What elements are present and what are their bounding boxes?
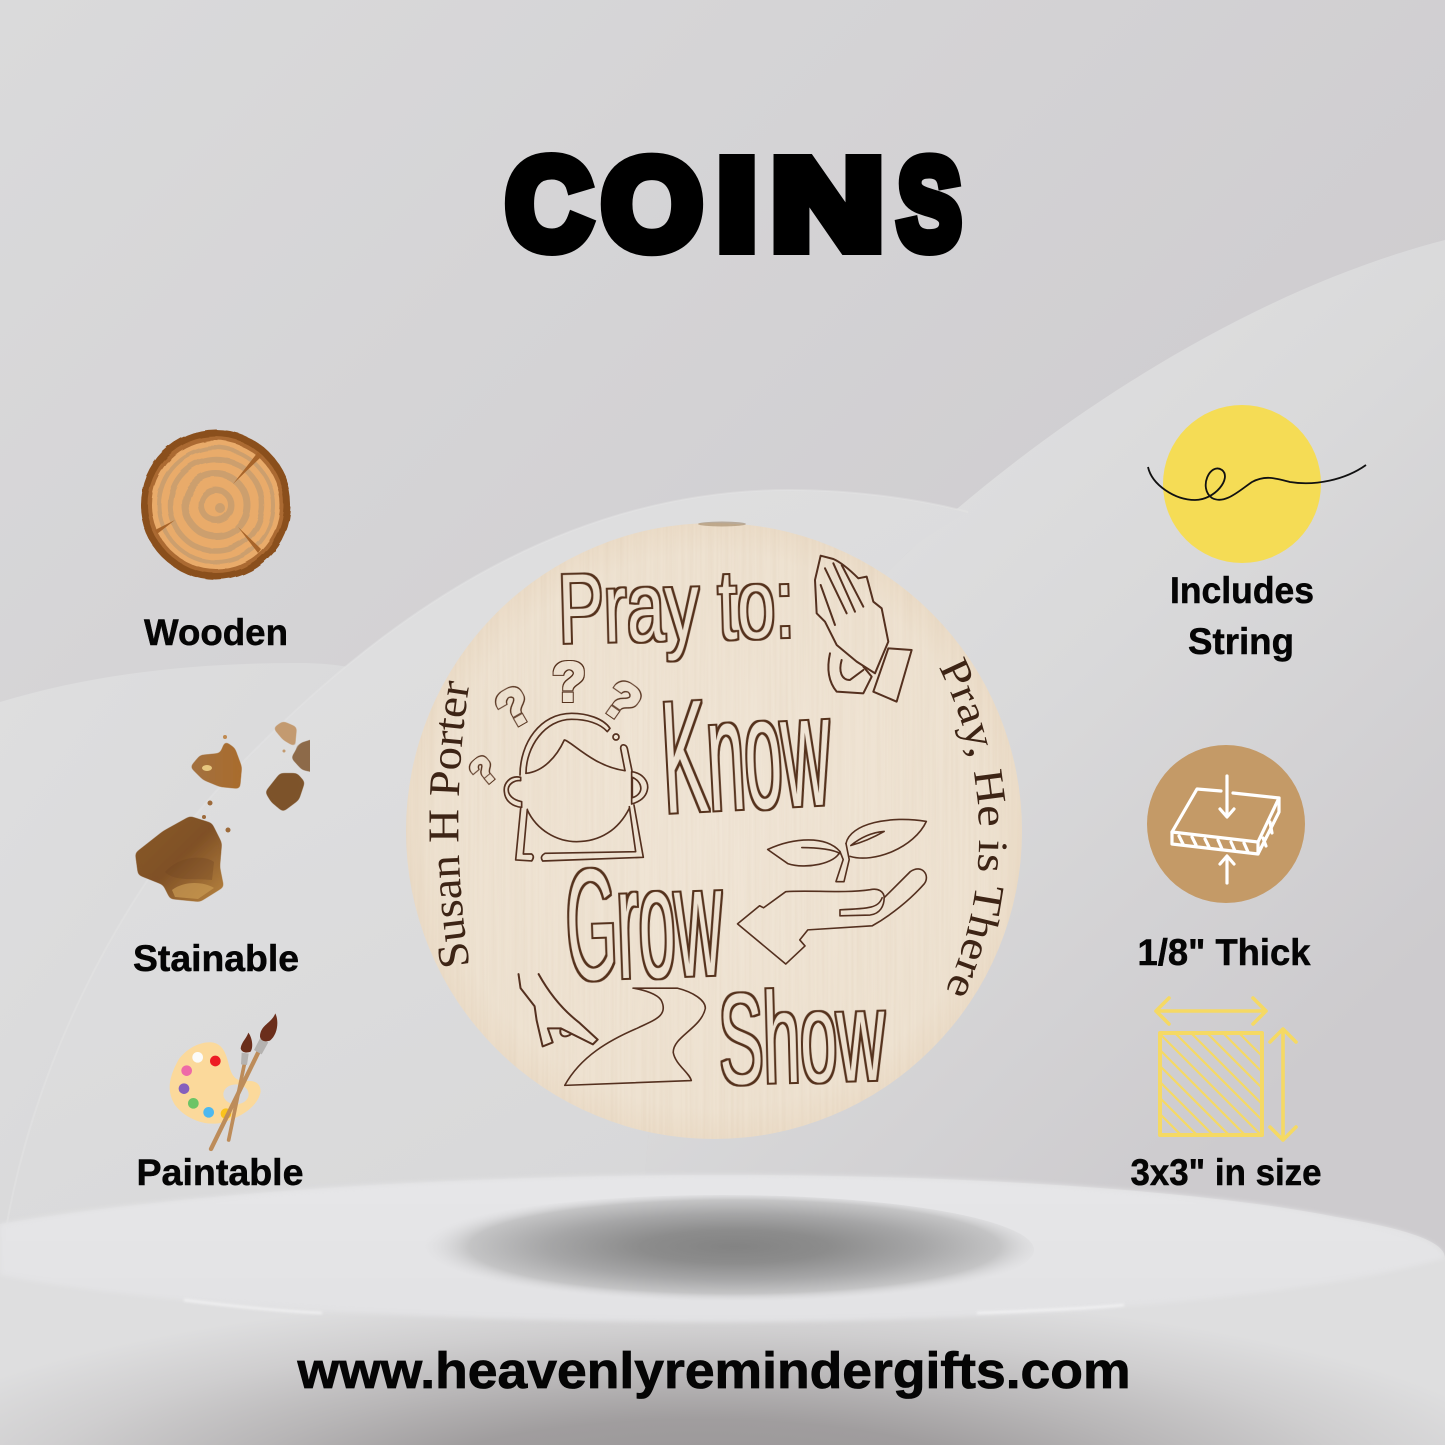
engraving: praying hands — [815, 556, 912, 702]
engraving: question marks: ? — [552, 650, 586, 713]
title: S — [898, 134, 961, 276]
icon: paint palette and brushes — [170, 1013, 277, 1149]
icon: thickness board — [1147, 745, 1305, 903]
icon: size square with arrows — [1156, 998, 1296, 1140]
coin heading: Pray to: Pray to: — [557, 548, 795, 664]
engraving: question marks: ? — [462, 748, 505, 793]
coin disc — [406, 523, 1022, 1139]
engraving: question marks: ? — [592, 669, 651, 735]
coin: Grow — [563, 833, 725, 1014]
coin side text: Susan H Porter: Susan H Porter — [430, 680, 469, 966]
icon: string on yellow circle — [1148, 405, 1366, 563]
label: Paintable: Paintable — [136, 1152, 304, 1193]
engraving: plant in hand — [738, 819, 926, 964]
coin word: Show: Show — [717, 964, 887, 1112]
icon: wooden log slice — [141, 430, 291, 580]
icon: wood stain splatter — [135, 721, 316, 902]
website url: www.heavenlyremindergifts.com — [296, 1342, 1131, 1399]
engraving: question marks: ? — [486, 675, 543, 741]
engraving: head — [504, 713, 648, 861]
label: Stainable: Stainable — [133, 938, 299, 979]
podium shadow — [410, 1195, 1034, 1305]
podium — [0, 1175, 1445, 1445]
label: Wooden: Wooden — [144, 612, 288, 653]
engraving: winding path and pointing hand — [519, 974, 705, 1085]
coin: Know — [657, 659, 835, 847]
label: 1/8" Thick: 1/8" Thick — [1138, 932, 1311, 973]
coin side text: Pray, He is There: Pray, He is There — [939, 656, 1007, 996]
label: Includes String: String — [1188, 621, 1294, 662]
title: C — [506, 134, 592, 276]
label: Includes String: Includes — [1170, 570, 1314, 611]
label: 3x3" in size: 3x3" in size — [1130, 1152, 1322, 1193]
title: N — [771, 134, 884, 276]
title: I — [717, 134, 757, 276]
title: O — [602, 134, 702, 276]
engraving: question marks — [462, 650, 651, 793]
label: Includes String — [1170, 570, 1314, 662]
coin — [406, 522, 1022, 1139]
